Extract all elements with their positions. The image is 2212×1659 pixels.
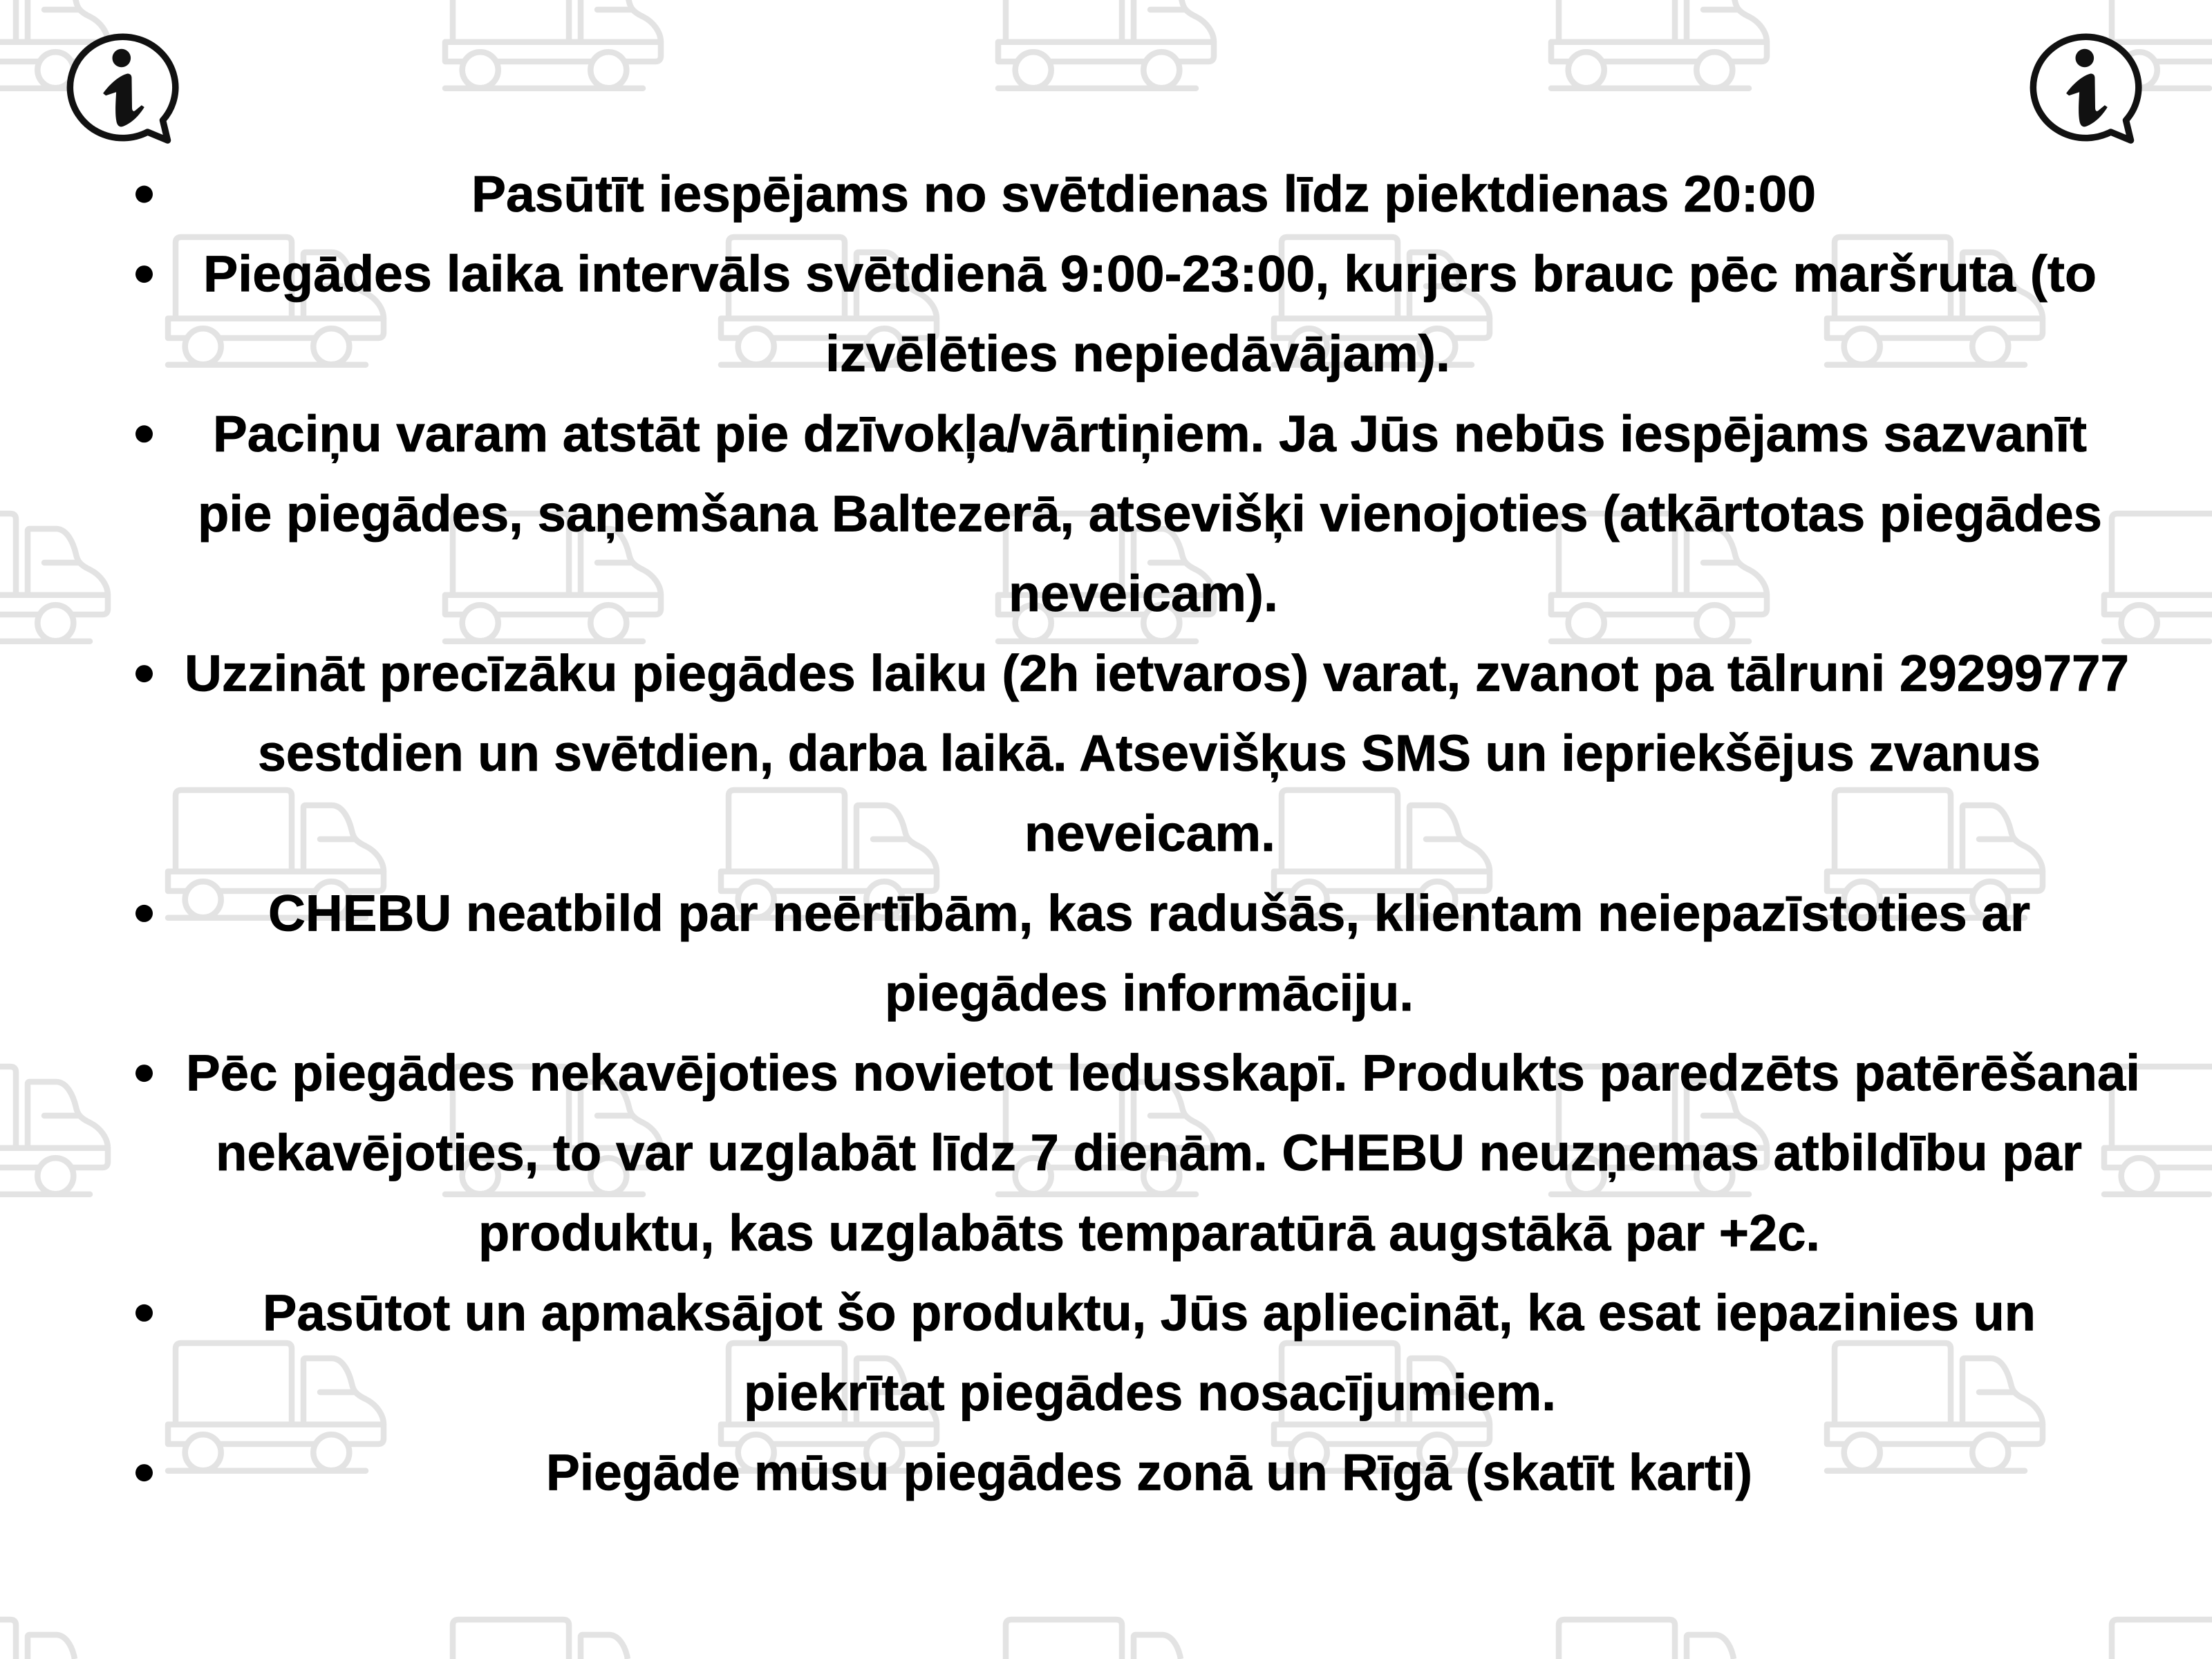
bullet item: acceptance of conditions bbox=[135, 1284, 2036, 1421]
bullet item: exact delivery time: neveicam. bbox=[1024, 805, 1275, 862]
bullet item: storage: nekavējoties, to var uzglabāt līdz 7 dienām. CHEBU neuzņemas atbildību par bbox=[216, 1124, 2082, 1182]
bullet item: delivery zone: Piegāde mūsu piegādes zonā un Rīgā (skatīt karti) bbox=[546, 1444, 1752, 1501]
bullet item: exact delivery time: sestdien un svētdien, darba laikā. Atsevišķus SMS un iepriekšējus zvanus bbox=[258, 724, 2041, 782]
bullet item: order times: Pasūtīt iespējams no svētdienas līdz piektdienas 20:00 bbox=[471, 165, 1816, 223]
bullet item: exact delivery time: Uzzināt precīzāku piegādes laiku (2h ietvaros) varat, zvanot pa tālruni 29299777 bbox=[185, 645, 2129, 702]
bullet item: CHEBU liability: piegādes informāciju. bbox=[885, 964, 1414, 1022]
bullet item: CHEBU liability bbox=[135, 884, 2030, 1022]
bullet item: leaving the parcel: neveicam). bbox=[1009, 565, 1278, 622]
bullet item: leaving the parcel bbox=[135, 405, 2102, 622]
bullet item: leaving the parcel: Paciņu varam atstāt pie dzīvokļa/vārtiņiem. Ja Jūs nebūs iespējams sazvanīt bbox=[213, 405, 2087, 463]
bullet item: leaving the parcel: pie piegādes, saņemšana Baltezerā, atsevišķi vienojoties (atkārtotas piegādes bbox=[198, 485, 2102, 543]
bullet item: delivery interval bbox=[135, 245, 2097, 382]
bullet item: acceptance of conditions: piekrītat piegādes nosacījumiem. bbox=[744, 1364, 1556, 1421]
bullet item: storage: produktu, kas uzglabāts temparatūrā augstākā par +2c. bbox=[478, 1204, 1820, 1262]
bullet item: delivery interval: izvēlēties nepiedāvājam). bbox=[825, 325, 1450, 382]
icon: info speech bubble right bbox=[2033, 37, 2139, 140]
bullet item: CHEBU liability: CHEBU neatbild par neērtībām, kas radušās, klientam neiepazīstoties ar bbox=[268, 884, 2030, 941]
bullet item: exact delivery time bbox=[135, 645, 2129, 862]
bullet item: acceptance of conditions: Pasūtot un apmaksājot šo produktu, Jūs apliecināt, ka esat iepazinies un bbox=[263, 1284, 2036, 1341]
bullet item: storage: Pēc piegādes nekavējoties novietot ledusskapī. Produkts paredzēts patērēšanai bbox=[186, 1044, 2140, 1102]
bullet item: storage bbox=[135, 1044, 2140, 1262]
icon: info speech bubble left bbox=[70, 37, 176, 140]
bullet item: delivery interval: Piegādes laika intervāls svētdienā 9:00-23:00, kurjers brauc pēc maršruta (to bbox=[203, 245, 2097, 303]
